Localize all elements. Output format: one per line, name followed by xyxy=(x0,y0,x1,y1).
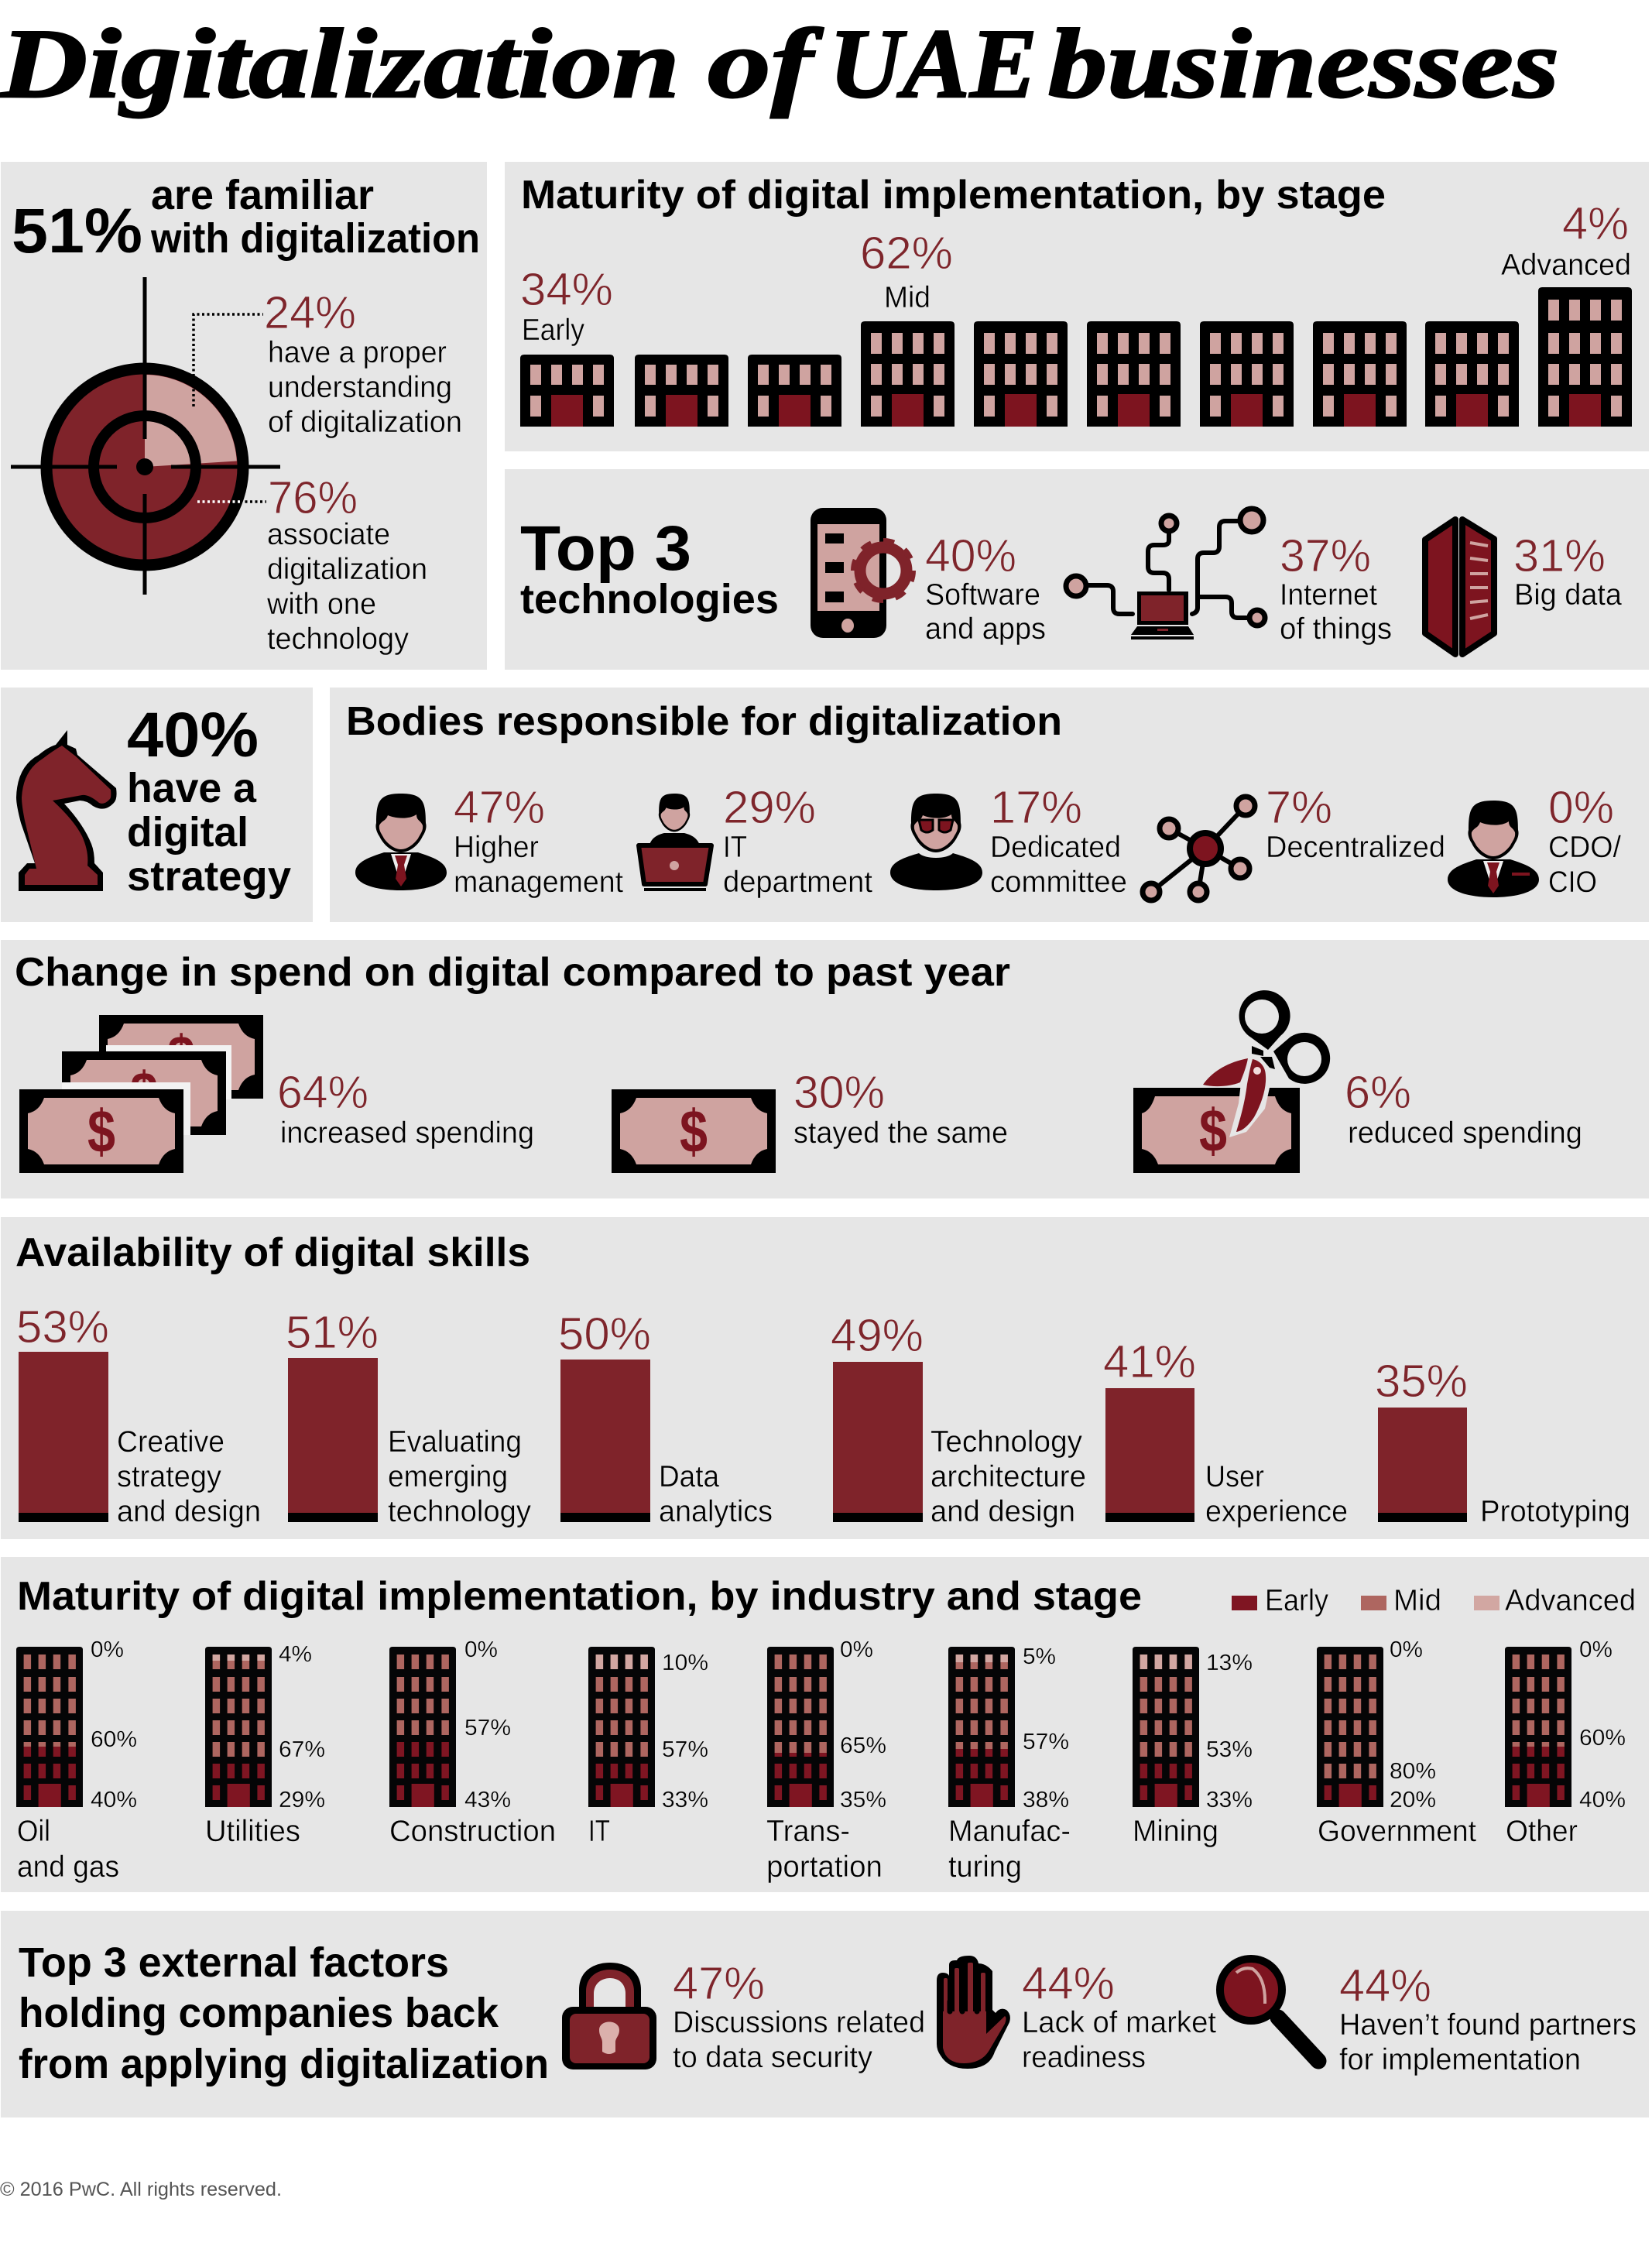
stat: 40%: 40% xyxy=(127,700,259,770)
building: other: 40% xyxy=(1579,1788,1626,1812)
legend: Mid xyxy=(1393,1584,1441,1617)
stat: CDO CIO: CIO xyxy=(1548,866,1597,899)
building: utilities: Utilities xyxy=(205,1815,300,1848)
panel: external factors xyxy=(1,1911,1649,2117)
building: other: Other xyxy=(1506,1815,1578,1848)
bar: creative strategy and design 53% xyxy=(16,1301,261,1528)
stat: CDO CIO xyxy=(1548,782,1621,899)
stat: early 34% xyxy=(520,264,613,347)
stat: internet of things: Internet xyxy=(1280,578,1377,612)
stat: dedicated committee: 17% xyxy=(990,782,1082,833)
bar: creative strategy and design 53%: and design xyxy=(117,1495,261,1528)
stat: advanced 4%: Advanced xyxy=(1501,249,1631,282)
stat: higher management: Higher xyxy=(454,831,539,864)
bar: prototyping 35% xyxy=(1375,1356,1630,1528)
stat: 76% xyxy=(266,472,427,656)
building: construction: Construction xyxy=(389,1815,556,1848)
icon: IT person with laptop xyxy=(639,794,711,891)
bar: technology architecture and design 49%: Technology xyxy=(931,1425,1082,1459)
building: government: 80% xyxy=(1390,1759,1436,1784)
stat: big data xyxy=(1513,530,1622,612)
stat: software and apps: and apps xyxy=(925,612,1046,646)
stat: big data: Big data xyxy=(1514,578,1622,612)
stat: internet of things: of things xyxy=(1280,612,1392,646)
bar: user experience 41%: 41% xyxy=(1103,1336,1196,1387)
stat: higher management xyxy=(454,782,623,899)
stat: 76%: with one xyxy=(266,588,376,621)
building: manufacturing xyxy=(948,1644,1071,1884)
building: mining: Mining xyxy=(1133,1815,1218,1848)
stat: 24%: 24% xyxy=(264,287,356,338)
bar: evaluating emerging technology 51% xyxy=(286,1307,531,1528)
panel: top 3 technologies xyxy=(505,469,1649,670)
building: transportation: 35% xyxy=(840,1788,886,1812)
icon: scissors cutting bill xyxy=(1133,990,1330,1173)
building: government: 20% xyxy=(1390,1788,1436,1812)
heading: Availability of digital skills xyxy=(15,1230,530,1275)
icon: chess knight xyxy=(16,730,117,891)
building: other xyxy=(1505,1637,1626,1848)
icon: stack of bills xyxy=(19,1015,263,1173)
bar: data analytics 50%: 50% xyxy=(558,1308,651,1360)
bar: evaluating emerging technology 51%: emerging xyxy=(388,1460,508,1493)
stat: 76%: digitalization xyxy=(267,553,427,586)
icon: magnifying glass xyxy=(1220,1959,1318,2061)
title: Digitalization xyxy=(0,9,680,118)
stat: market readiness xyxy=(1022,1958,1216,2074)
heading: technologies xyxy=(520,576,779,622)
bar: technology architecture and design 49%: and design xyxy=(931,1495,1075,1528)
building: government xyxy=(1317,1637,1476,1848)
icon: manager xyxy=(355,794,447,890)
building: oil and gas: Oil xyxy=(17,1815,50,1848)
stat: market readiness: readiness xyxy=(1022,2041,1146,2074)
stat: IT department: IT xyxy=(723,831,747,864)
text: have a digital strategy: digital xyxy=(127,809,248,856)
stat: software and apps: Software xyxy=(925,578,1040,612)
text: have a digital strategy: strategy xyxy=(127,853,291,900)
stat: mid 62%: Mid xyxy=(884,281,931,314)
icon: big data server xyxy=(1425,519,1494,654)
stat: stayed the same: 30% xyxy=(793,1067,885,1118)
stat: 51%: 51% xyxy=(12,196,142,266)
stat: data security xyxy=(673,1958,925,2074)
stat: big data: 31% xyxy=(1513,530,1606,581)
bar: creative strategy and design 53%: 53% xyxy=(16,1301,109,1353)
copyright: © 2016 PwC. All rights reserved. xyxy=(0,2179,282,2200)
stat: reduced spending: reduced spending xyxy=(1348,1116,1582,1150)
building: IT: 57% xyxy=(662,1737,708,1762)
building: oil and gas: 40% xyxy=(91,1788,137,1812)
building: manufacturing: 5% xyxy=(1023,1644,1056,1669)
stat: 24%: of digitalization xyxy=(268,406,462,439)
title xyxy=(0,9,1559,118)
heading: Bodies responsible for digitalization xyxy=(346,699,1062,744)
icon: decentralized network xyxy=(1143,797,1255,900)
stat: IT department: 29% xyxy=(723,782,816,833)
bar: data analytics 50%: analytics xyxy=(659,1495,773,1528)
text: have a digital strategy xyxy=(127,765,291,900)
stat: dedicated committee: Dedicated xyxy=(990,831,1121,864)
stat: advanced 4%: 4% xyxy=(1562,198,1629,249)
stat: 24% xyxy=(264,287,462,439)
panel: maturity by industry and stage xyxy=(1,1557,1649,1892)
building: utilities: 67% xyxy=(279,1737,325,1762)
stat: partners: Haven’t found partners xyxy=(1339,2008,1637,2042)
stat: IT department xyxy=(723,782,872,899)
icon: padlock xyxy=(562,1963,656,2069)
building: manufacturing: 38% xyxy=(1023,1788,1069,1812)
stat: mid 62% xyxy=(860,228,953,314)
building: mining: 33% xyxy=(1206,1788,1253,1812)
building: transportation: portation xyxy=(766,1850,883,1884)
heading: Top 3 external factors xyxy=(19,1939,449,1986)
bar: evaluating emerging technology 51%: technology xyxy=(388,1495,531,1528)
bar: evaluating emerging technology 51%: Evaluating xyxy=(388,1425,522,1459)
stat: 76%: associate xyxy=(267,518,390,551)
bar: user experience 41%: User xyxy=(1205,1460,1264,1493)
bar: technology architecture and design 49% xyxy=(831,1310,1086,1528)
building: government: Government xyxy=(1318,1815,1476,1848)
stat: data security: Discussions related xyxy=(673,2006,925,2039)
stat: decentralized xyxy=(1266,782,1445,864)
stat: partners xyxy=(1339,1960,1637,2076)
building: construction xyxy=(389,1637,556,1848)
building: construction: 57% xyxy=(464,1716,511,1740)
buildings: row of ten xyxy=(520,287,1632,427)
building: utilities: 29% xyxy=(279,1788,325,1812)
heading: Maturity of digital implementation, by stage xyxy=(521,173,1386,218)
stat: software and apps: 40% xyxy=(925,530,1016,581)
panel: bodies responsible xyxy=(330,688,1649,922)
legend: Advanced xyxy=(1505,1584,1636,1617)
stat: 24%: understanding xyxy=(268,371,452,404)
stat: IT department: department xyxy=(723,866,872,899)
legend xyxy=(1232,1584,1636,1617)
building: transportation xyxy=(766,1637,886,1884)
bar: data analytics 50%: Data xyxy=(659,1460,719,1493)
stat: increased spending: increased spending xyxy=(280,1116,534,1150)
panel: familiarity with digitalization xyxy=(1,162,487,670)
icon: CDO CIO xyxy=(1448,801,1539,897)
building: construction: 43% xyxy=(464,1788,511,1812)
building: transportation: 0% xyxy=(840,1637,873,1662)
stat: software and apps xyxy=(925,530,1046,646)
icon: committee person with glasses xyxy=(890,794,982,890)
icon: scissors cutting bill: $ xyxy=(1199,1096,1227,1164)
stat: decentralized: 7% xyxy=(1266,782,1332,833)
stat: internet of things xyxy=(1280,530,1392,646)
building: manufacturing: turing xyxy=(948,1850,1022,1884)
icon: stop hand xyxy=(937,1956,1010,2069)
bar: prototyping 35%: 35% xyxy=(1375,1356,1468,1407)
building: other: 60% xyxy=(1579,1726,1626,1751)
bar: prototyping 35%: Prototyping xyxy=(1480,1495,1630,1528)
stat: stayed the same xyxy=(793,1067,1008,1150)
heading: Maturity of digital implementation, by industry and stage xyxy=(17,1574,1142,1619)
heading: are familiar with digitalization xyxy=(150,172,480,262)
callout line to 76% xyxy=(197,500,266,503)
building: IT xyxy=(588,1647,708,1848)
icon: phone with gear xyxy=(811,508,913,638)
heading xyxy=(19,1939,549,2087)
stat: partners: for implementation xyxy=(1339,2043,1581,2076)
building: oil and gas xyxy=(16,1637,137,1884)
bar: user experience 41% xyxy=(1103,1336,1348,1528)
bar: data analytics 50% xyxy=(558,1308,773,1528)
building: mining: 13% xyxy=(1206,1651,1253,1675)
stat: advanced 4% xyxy=(1501,198,1631,282)
title: of xyxy=(708,9,824,118)
building: oil and gas: 0% xyxy=(91,1637,124,1662)
stat: mid 62%: 62% xyxy=(860,228,953,279)
legend: Early xyxy=(1265,1584,1328,1617)
stat: decentralized: Decentralized xyxy=(1266,831,1445,864)
heading: are familiar with digitalization: with digitalization xyxy=(150,215,480,262)
building: IT: 33% xyxy=(662,1788,708,1812)
bar: creative strategy and design 53%: strategy xyxy=(117,1460,221,1493)
stat: early 34%: Early xyxy=(522,314,584,347)
stat: market readiness: 44% xyxy=(1022,1958,1115,2009)
stat: dedicated committee: committee xyxy=(990,866,1127,899)
building: manufacturing: 57% xyxy=(1023,1730,1069,1754)
building: transportation: 65% xyxy=(840,1733,886,1758)
heading xyxy=(520,513,779,622)
panel: availability of digital skills xyxy=(1,1217,1649,1539)
icon: single bill xyxy=(612,1089,776,1173)
building: IT: 10% xyxy=(662,1651,708,1675)
building: utilities: 4% xyxy=(279,1642,312,1667)
text: have a digital strategy: have a xyxy=(127,765,257,811)
icon: internet of things xyxy=(1066,509,1265,640)
stat: stayed the same: stayed the same xyxy=(793,1116,1008,1150)
stat: reduced spending xyxy=(1345,1067,1582,1150)
stat: internet of things: 37% xyxy=(1280,530,1371,581)
bar: technology architecture and design 49%: 49% xyxy=(831,1310,924,1361)
building: government: 0% xyxy=(1390,1637,1423,1662)
stat: CDO CIO: 0% xyxy=(1548,782,1614,833)
panel: digital strategy xyxy=(1,688,313,922)
stat: CDO CIO: CDO/ xyxy=(1548,831,1621,864)
stat: 24%: have a proper xyxy=(268,336,447,369)
stat: early 34%: 34% xyxy=(520,264,613,315)
stat: 76%: technology xyxy=(267,622,409,656)
building: mining: 53% xyxy=(1206,1737,1253,1762)
heading: are familiar with digitalization: are familiar xyxy=(151,172,374,218)
stat: dedicated committee xyxy=(990,782,1127,899)
building: utilities xyxy=(205,1642,325,1848)
stat: higher management: 47% xyxy=(454,782,545,833)
building: transportation: Trans- xyxy=(766,1815,850,1848)
stat: data security: 47% xyxy=(673,1958,765,2009)
icon: target chart 24% and 76% xyxy=(11,277,280,595)
building: oil and gas: 60% xyxy=(91,1727,137,1752)
heading: holding companies back xyxy=(19,1990,499,2036)
building: oil and gas: and gas xyxy=(17,1850,119,1884)
stat: 76%: 76% xyxy=(268,472,358,523)
building: IT: IT xyxy=(588,1815,610,1848)
panel: change in spend xyxy=(1,940,1649,1198)
bar: evaluating emerging technology 51%: 51% xyxy=(286,1307,379,1358)
stat: increased spending xyxy=(277,1067,534,1150)
heading: from applying digitalization xyxy=(19,2041,549,2087)
bar: user experience 41%: experience xyxy=(1205,1495,1348,1528)
heading: Top 3 xyxy=(520,513,691,584)
bar: creative strategy and design 53%: Creative xyxy=(117,1425,224,1459)
callout line to 24% xyxy=(194,314,263,406)
stat: market readiness: Lack of market xyxy=(1022,2006,1216,2039)
bar: technology architecture and design 49%: architecture xyxy=(931,1460,1086,1493)
stat: reduced spending: 6% xyxy=(1345,1067,1411,1118)
building: mining xyxy=(1133,1647,1253,1848)
title: businesses xyxy=(1048,9,1559,118)
building: other: 0% xyxy=(1579,1637,1613,1662)
heading: Change in spend on digital compared to past year xyxy=(15,950,1010,995)
title: UAE xyxy=(829,9,1037,118)
stat: increased spending: 64% xyxy=(277,1067,368,1118)
panel: maturity by stage xyxy=(505,162,1649,451)
building: manufacturing: Manufac- xyxy=(948,1815,1071,1848)
building: construction: 0% xyxy=(464,1637,498,1662)
stat: data security: to data security xyxy=(673,2041,872,2074)
stat: higher management: management xyxy=(454,866,623,899)
stat: partners: 44% xyxy=(1339,1960,1431,2011)
